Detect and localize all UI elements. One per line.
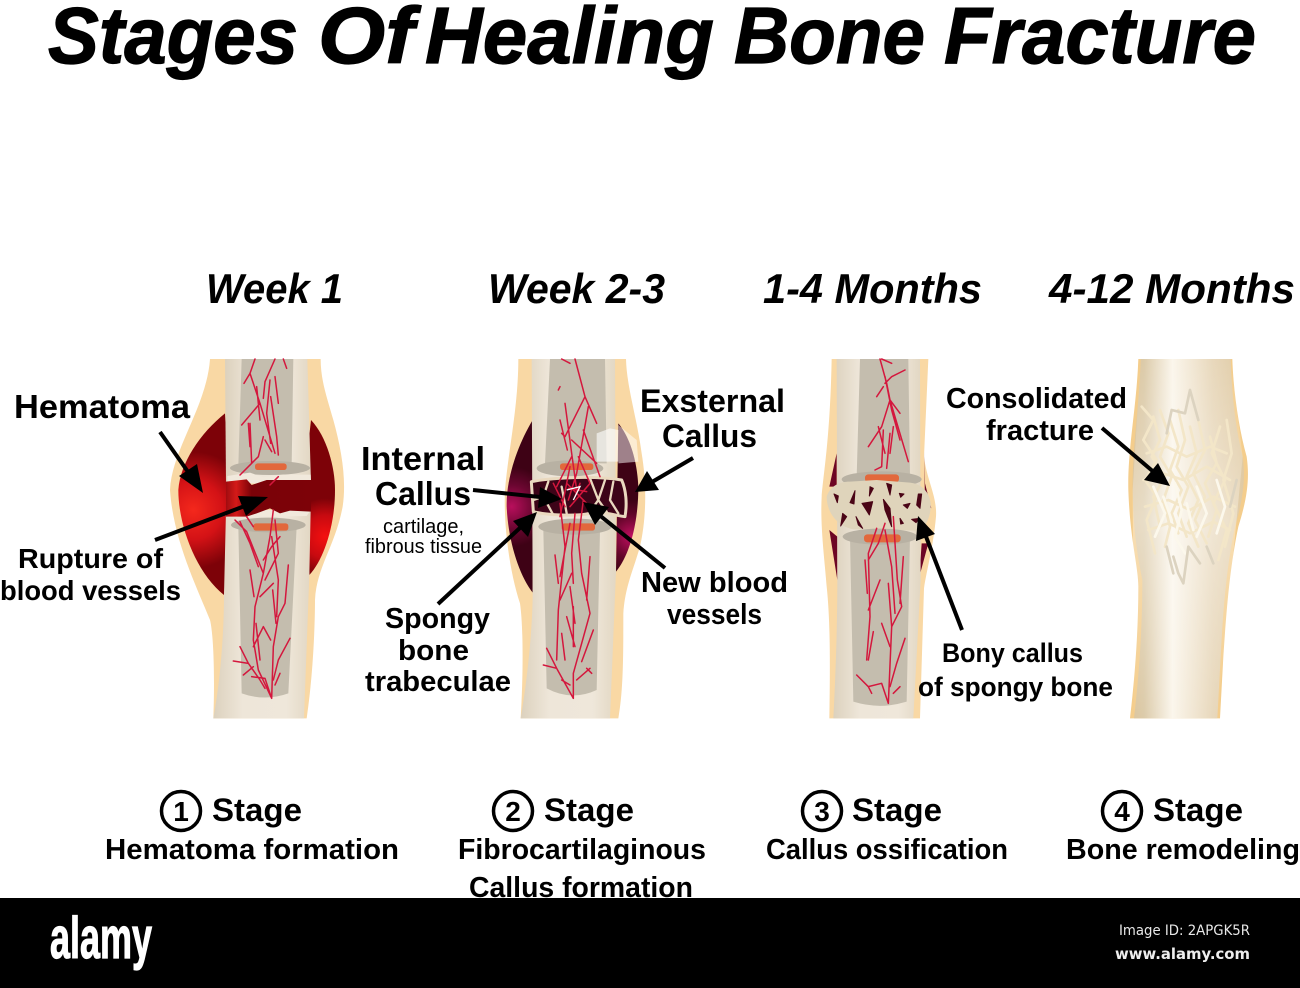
footer bar: www.alamy.com bbox=[1115, 945, 1250, 963]
label: bony callus of spongy bone bbox=[918, 638, 1113, 702]
stage 4 caption: Stage bbox=[1153, 792, 1243, 828]
label: rupture of blood vessels: Rupture of bbox=[18, 543, 164, 574]
label: cartilage, fibrous tissue bbox=[365, 516, 482, 558]
label: spongy bone trabeculae: Spongy bbox=[385, 603, 490, 635]
label: new blood vessels: New blood bbox=[641, 567, 788, 599]
label: new blood vessels: vessels bbox=[667, 599, 762, 631]
heading: Week 1: Week 1 bbox=[206, 265, 343, 312]
arrow: external callus bbox=[635, 458, 693, 492]
heading: Week 2-3: Week 2-3 bbox=[488, 265, 665, 312]
stage 2 caption: Stage bbox=[544, 792, 634, 828]
label: bony callus of spongy bone: of spongy bone bbox=[918, 672, 1113, 702]
label: consolidated fracture bbox=[946, 383, 1127, 447]
label: rupture of blood vessels bbox=[0, 543, 181, 606]
arrow: new blood vessels bbox=[583, 502, 665, 568]
stage 1 caption bbox=[105, 792, 399, 866]
arrow: consolidated fracture bbox=[1102, 428, 1170, 486]
illustration: stage 4 remodeled bone bbox=[1128, 359, 1248, 718]
label: internal callus: Internal bbox=[361, 440, 485, 477]
stage 2 caption: Callus formation bbox=[469, 872, 693, 904]
stage 2 caption: Fibrocartilaginous bbox=[458, 834, 706, 866]
label: cartilage, fibrous tissue: fibrous tissue bbox=[365, 536, 482, 558]
label: spongy bone trabeculae bbox=[365, 603, 511, 698]
stage 1 caption: Stage bbox=[212, 792, 302, 828]
label: consolidated fracture: fracture bbox=[986, 415, 1094, 447]
label: internal callus bbox=[361, 440, 485, 512]
arrow: internal callus bbox=[473, 487, 562, 508]
label: external callus: Callus bbox=[662, 418, 757, 454]
footer bar bbox=[0, 898, 1300, 988]
arrow: hematoma bbox=[160, 432, 203, 493]
heading: 4-12 Months: 4-12 Months bbox=[1048, 265, 1295, 312]
label: new blood vessels bbox=[641, 567, 788, 631]
label: Hematoma: Hematoma bbox=[14, 388, 191, 425]
stage 3 caption: 3 bbox=[814, 796, 830, 827]
arrow: rupture of blood vessels bbox=[155, 496, 268, 540]
arrow: bony callus bbox=[916, 516, 962, 630]
illustration: stage 1 hematoma bone bbox=[170, 359, 344, 718]
stage 3 caption: Callus ossification bbox=[766, 834, 1008, 866]
label: spongy bone trabeculae: trabeculae bbox=[365, 666, 511, 698]
footer bar: alamy bbox=[50, 906, 152, 971]
stage 2 caption: 2 bbox=[505, 796, 521, 827]
stage 3 caption: Stage bbox=[852, 792, 942, 828]
label: cartilage, fibrous tissue: cartilage, bbox=[383, 516, 464, 538]
stage 1 caption: 1 bbox=[173, 796, 189, 827]
heading: 1-4 Months: 1-4 Months bbox=[763, 265, 982, 312]
label: spongy bone trabeculae: bone bbox=[398, 635, 469, 667]
title bbox=[48, 0, 1256, 80]
footer bar: Image ID: 2APGK5R bbox=[1119, 923, 1250, 939]
arrow: spongy bone trabeculae bbox=[438, 512, 537, 604]
stage 3 caption bbox=[766, 792, 1008, 866]
label: external callus bbox=[640, 383, 785, 454]
stage 4 caption: Bone remodeling bbox=[1066, 834, 1300, 866]
stage 2 caption bbox=[458, 792, 706, 904]
stage 4 caption: 4 bbox=[1114, 796, 1130, 827]
label: rupture of blood vessels: blood vessels bbox=[0, 575, 181, 606]
illustration: stage 3 callus ossification bone bbox=[821, 359, 936, 718]
label: internal callus: Callus bbox=[375, 475, 471, 512]
stage 4 caption bbox=[1066, 792, 1300, 866]
label: consolidated fracture: Consolidated bbox=[946, 383, 1127, 415]
label: bony callus of spongy bone: Bony callus bbox=[942, 638, 1083, 668]
illustration: stage 2 fibrocartilaginous callus bone bbox=[505, 359, 645, 718]
stage 1 caption: Hematoma formation bbox=[105, 834, 399, 866]
label: external callus: Exsternal bbox=[640, 383, 785, 419]
